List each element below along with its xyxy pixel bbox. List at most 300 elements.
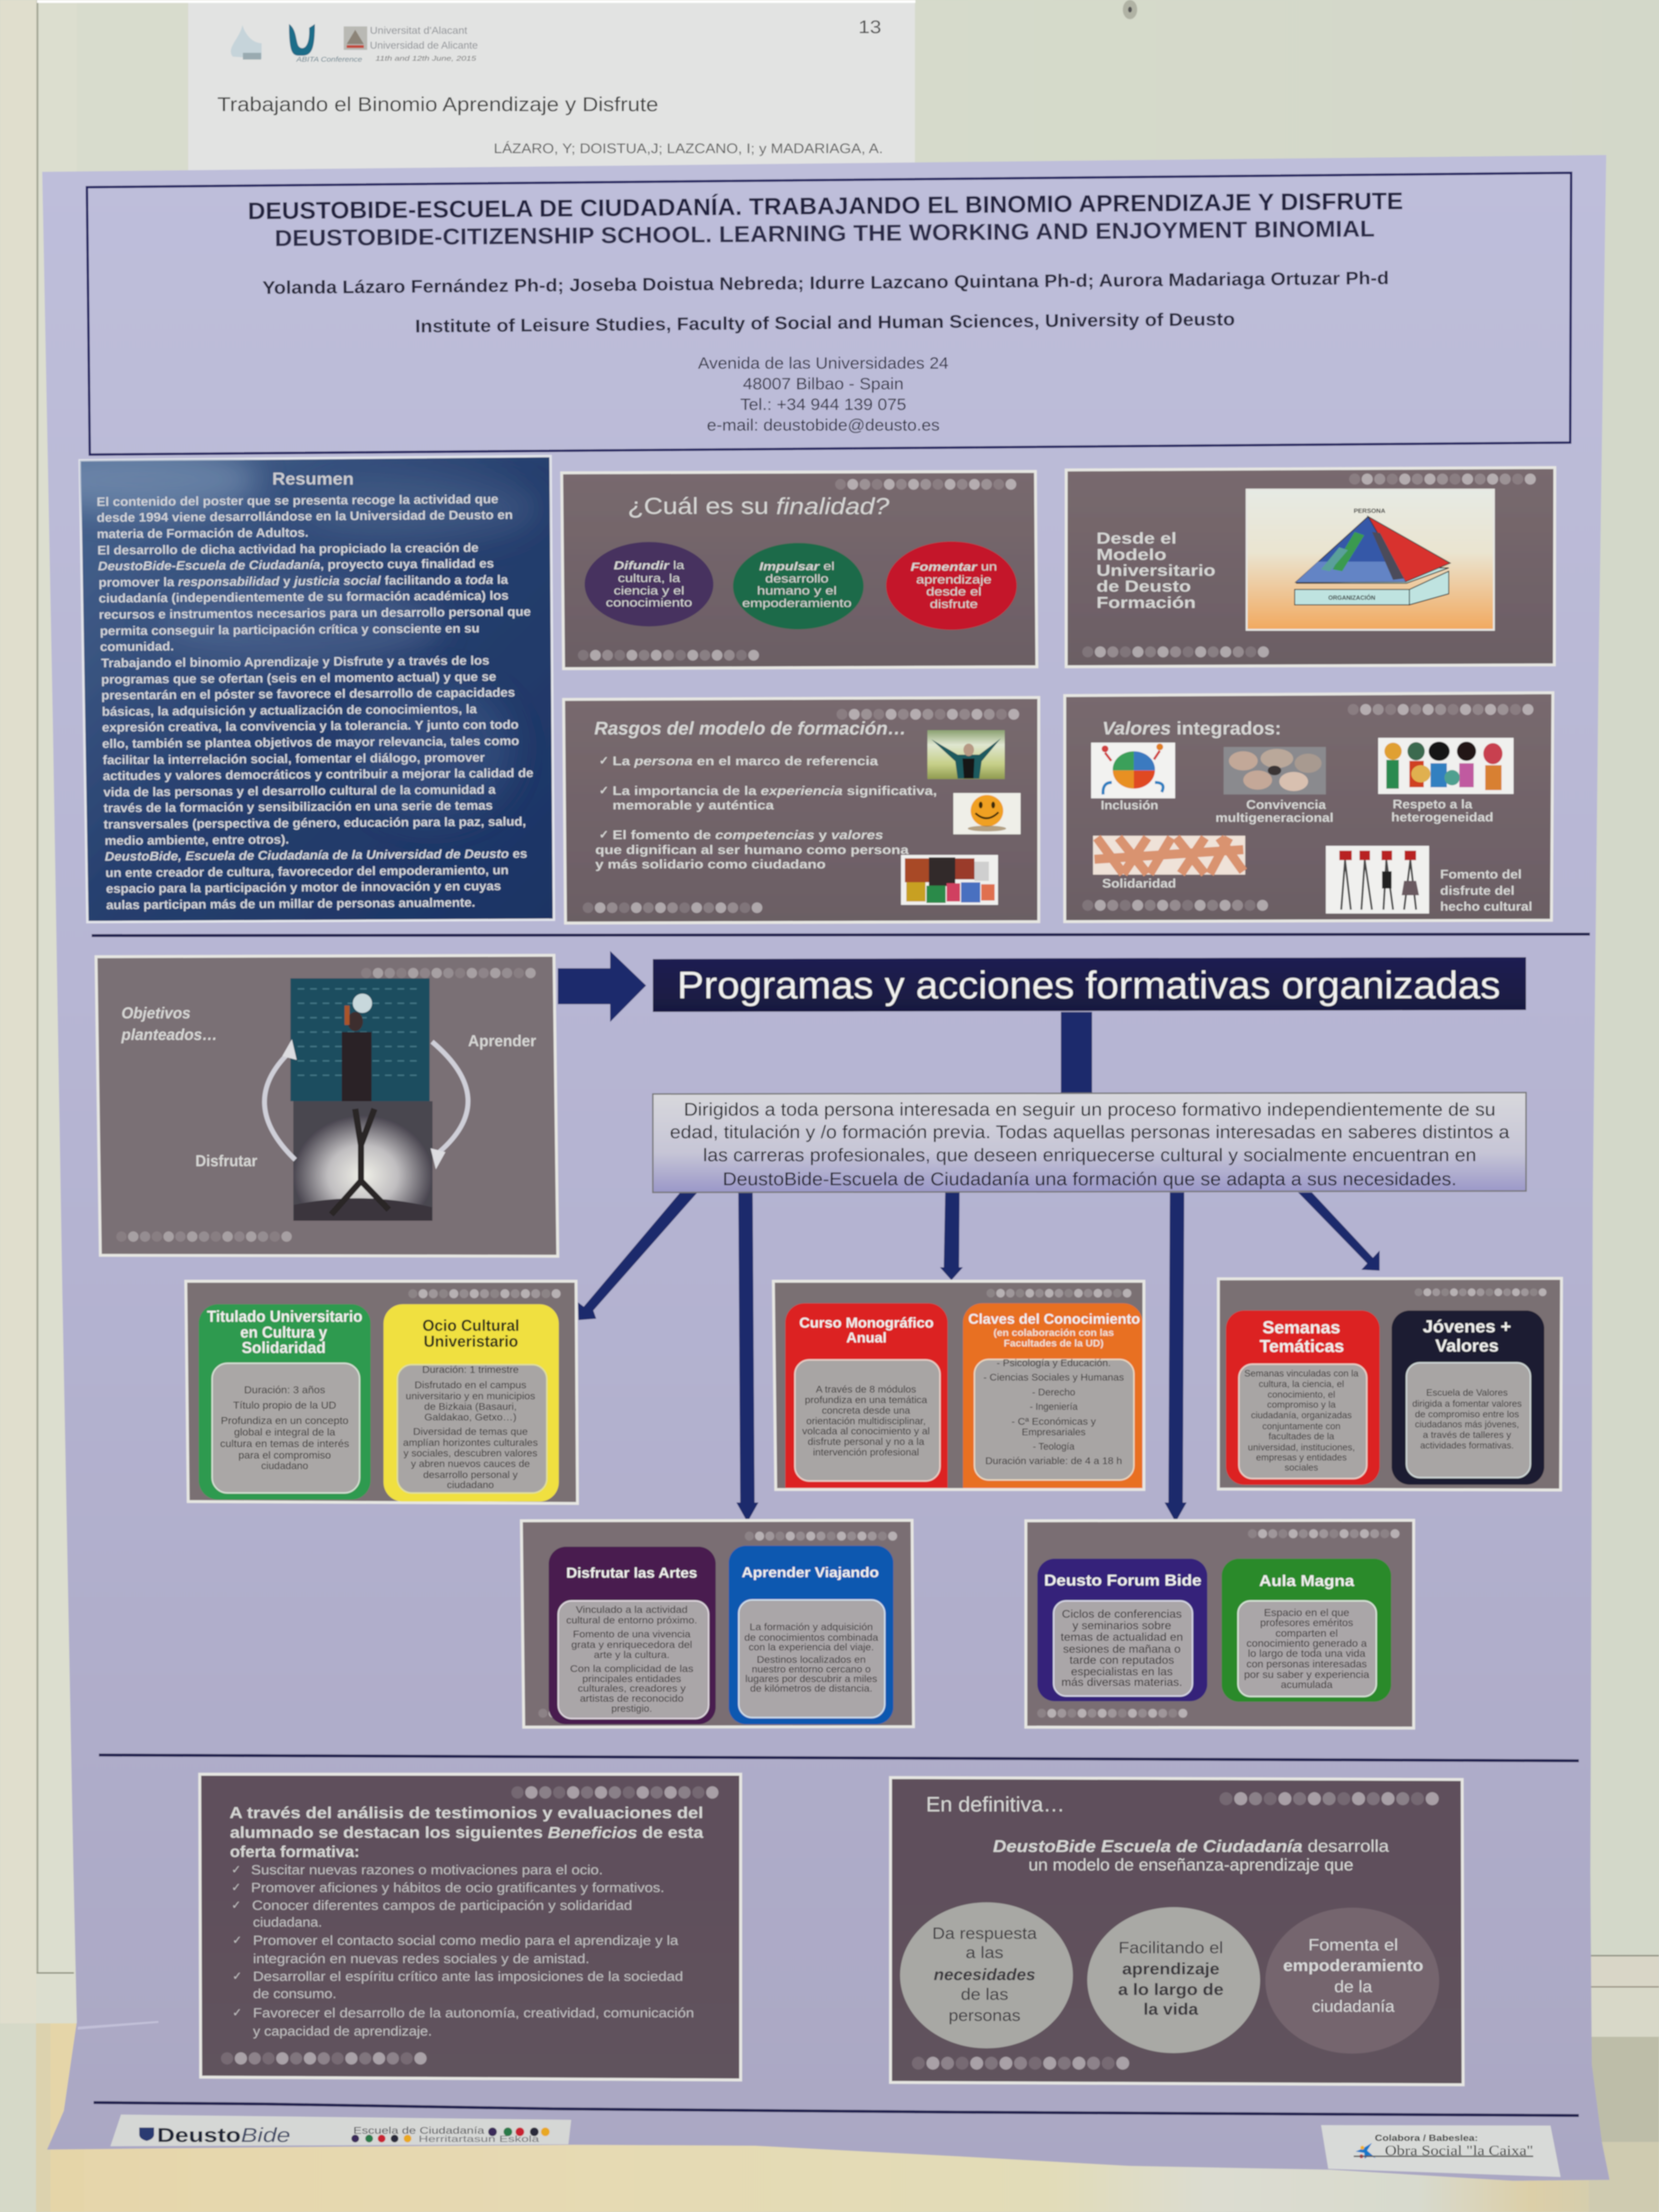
card: curso monográfico: volcada al conocimiento y al — [802, 1426, 930, 1437]
abstract text: través de la formación y sensibilización en una serie de temas — [104, 798, 493, 815]
card: curso monográfico: disfrute personal y no a la — [807, 1437, 925, 1447]
institution: Institute of Leisure Studies, Faculty of Social and Human Sciences, University of Deusto — [415, 310, 1235, 337]
circle: difundir: conocimiento — [606, 596, 692, 610]
intro text — [993, 1837, 1389, 1874]
circle: difundir: cultura, la — [618, 572, 681, 585]
circle: aprendizaje: aprendizaje — [1122, 1960, 1219, 1978]
logo box: obra social la caixa: Colabora / Babeslea: — [1375, 2133, 1478, 2143]
caption: fomento — [1440, 867, 1532, 914]
card: ocio cultural: de Bizkaia (Basauri, — [424, 1402, 517, 1412]
card: claves del conocimiento: Claves del Conocimiento — [968, 1311, 1140, 1327]
card: disfrutar las artes — [549, 1547, 716, 1724]
card: curso monográfico: Anual — [846, 1330, 887, 1346]
text: objetivos: planteados… — [121, 1025, 217, 1044]
card: deusto forum bide — [1037, 1559, 1207, 1701]
card: semanas temáticas: Semanas vinculadas con la — [1244, 1369, 1358, 1379]
text: desde el modelo: Formación — [1096, 593, 1196, 612]
card: disfrutar las artes: Fomento de una vivencia — [573, 1629, 691, 1640]
icon: conference logos: 11th and 12th June, 2015 — [375, 55, 477, 62]
card: aprender viajando: Destinos localizados en — [757, 1655, 866, 1665]
caption: convivencia: multigeneracional — [1215, 810, 1334, 825]
card: titulado universitario: cultura en temas de interés — [220, 1438, 349, 1450]
list of traits: ✓ — [599, 755, 609, 767]
circle: fomentar: disfrute — [930, 598, 978, 611]
caption: respeto: heterogeneidad — [1391, 810, 1493, 824]
circle: aprendizaje: la vida — [1143, 2000, 1199, 2019]
benefits list — [231, 1863, 694, 2038]
card: aprender viajando: Aprender Viajando — [742, 1565, 879, 1580]
benefits list: Conocer diferentes campos de participación y solidaridad — [252, 1898, 632, 1912]
photo: smiley — [953, 793, 1021, 834]
card: disfrutar las artes: prestigio. — [612, 1704, 652, 1714]
abstract text: Trabajando el binomio Aprendizaje y Disfrute y a través de los — [101, 653, 490, 670]
caption: convivencia: Convivencia — [1246, 797, 1326, 812]
card: aula magna: con personas interesadas — [1246, 1659, 1367, 1670]
icon: conference logos — [231, 24, 478, 63]
benefits list: ✓ — [232, 2007, 242, 2019]
card: ocio cultural: Ocio Cultural — [422, 1316, 519, 1334]
panel: forum y aula magna — [1026, 1520, 1414, 1728]
abstract text: un ente creador de cultura, favorecedor del empoderamiento, un — [105, 863, 509, 880]
card: jóvenes + valores — [1392, 1310, 1544, 1485]
benefits list: Favorecer el desarrollo de la autonomía, creatividad, comunicación — [253, 2006, 694, 2020]
text: desde el modelo: Desde el — [1096, 529, 1177, 547]
card: ocio cultural: universitario y en municipios — [406, 1391, 535, 1402]
abstract text — [96, 492, 534, 912]
arrow: to semanas panel — [1298, 1192, 1380, 1271]
circle: empoderamiento: ciudadanía — [1312, 1997, 1395, 2016]
circle: fomentar: desde el — [926, 586, 981, 598]
list of traits: memorable y auténtica — [613, 798, 774, 812]
text: desde el modelo — [1096, 529, 1215, 612]
logo box: obra social la caixa — [1321, 2125, 1561, 2177]
heading: Rasgos del modelo de formación… — [594, 719, 906, 739]
description box: edad, titulación y /o formación previa. Todas aquellas personas interesadas en saberes distintos a — [670, 1122, 1510, 1142]
circle: necesidades: a las — [966, 1944, 1003, 1962]
arrow: to forum panel — [1165, 1192, 1187, 1522]
card: titulado universitario: ciudadano — [261, 1460, 308, 1472]
labels: aprender and disfrutar — [195, 1032, 536, 1169]
icon: deusto shield — [139, 2128, 154, 2141]
card: disfrutar las artes: principales entidades — [582, 1674, 681, 1684]
description box: DeustoBide-Escuela de Ciudadanía una formación que se adapta a sus necesidades. — [723, 1169, 1456, 1190]
photo: person jumping — [293, 1101, 433, 1221]
abstract text: espacio para la participación y motor de innovación y en cuyas — [106, 878, 501, 896]
heading text: oferta formativa: — [230, 1842, 360, 1861]
card: disfrutar las artes: culturales, creadores y — [578, 1683, 685, 1694]
heading: ¿Cuál es su finalidad? — [628, 493, 890, 519]
card: aula magna: Espacio en el que — [1264, 1607, 1349, 1619]
logo box: obra social la caixa: Obra Social "la Caixa" — [1385, 2143, 1533, 2158]
list of traits: La persona en el marco de referencia — [613, 754, 878, 768]
benefits list: ✓ — [231, 1899, 241, 1911]
photo: collage — [901, 855, 998, 905]
brand name: Deusto Bide — [157, 2124, 290, 2146]
circle: empoderamiento: de la — [1334, 1978, 1372, 1996]
card: jóvenes + valores: de compromiso entre los — [1415, 1409, 1519, 1420]
card: claves del conocimiento: - Teología — [1033, 1442, 1075, 1452]
card: jóvenes + valores: ciudadanos más jóvenes, — [1415, 1420, 1519, 1430]
conference sheet — [188, 3, 915, 171]
panel: rasgos del modelo — [564, 697, 1039, 923]
abstract text: promover la responsabilidad y justicia social facilitando a toda la — [98, 572, 508, 589]
card: deusto forum bide: especialistas en las — [1071, 1665, 1173, 1678]
card: deusto forum bide: más diversas materias. — [1061, 1676, 1182, 1688]
icon: conference logos: Universidad de Alicante — [370, 40, 478, 51]
sheet title: Trabajando el Binomio Aprendizaje y Disfrute — [217, 93, 659, 115]
image: fashion sketch figures — [1326, 846, 1429, 914]
heading: En definitiva… — [926, 1792, 1065, 1816]
panel: en definitiva — [890, 1778, 1463, 2085]
card: disfrutar las artes: Vinculado a la actividad — [576, 1605, 687, 1615]
escuela de ciudadanía wordmark — [351, 2126, 550, 2144]
card: deusto forum bide: Deusto Forum Bide — [1044, 1572, 1202, 1589]
abstract text: expresión creativa, la convivencia y la tolerancia. Y junto con todo — [102, 717, 519, 734]
photo: woman with raised arms — [927, 730, 1005, 779]
benefits list: ciudadana. — [253, 1914, 322, 1930]
card: jóvenes + valores: actividades formativas. — [1420, 1441, 1514, 1451]
card: semanas temáticas: universidad, instituciones, — [1248, 1443, 1355, 1453]
card: ocio cultural: y sociales, descubren valores — [403, 1448, 538, 1459]
abstract text: vida de las personas y el desarrollo cultural de la comunidad a — [103, 782, 496, 799]
card: titulado universitario: Titulado Universitario — [207, 1308, 362, 1325]
title: DEUSTOBIDE-ESCUELA DE CIUDADANÍA. TRABAJANDO EL BINOMIO APRENDIZAJE Y DISFRUTE — [248, 188, 1403, 225]
circle: impulsar: empoderamiento — [742, 597, 852, 610]
card: titulado universitario: Profundiza en un concepto — [221, 1415, 349, 1427]
abstract text: actitudes y valores democráticos y contribuir a mejorar la calidad de — [103, 766, 533, 783]
heading: Valores integrados: — [1102, 719, 1281, 739]
panel: resumen — [78, 454, 556, 924]
chart: pyramid diagram — [1247, 490, 1494, 630]
card: curso monográfico: A través de 8 módulos — [816, 1384, 916, 1395]
abstract text: DeustoBide, Escuela de Ciudadanía de la Universidad de Deusto es — [105, 846, 527, 864]
benefits list: Suscitar nuevas razones o motivaciones para el ocio. — [251, 1863, 603, 1877]
list of traits — [595, 754, 937, 871]
panel: finalidad — [562, 471, 1037, 669]
card: claves del conocimiento: - Cª Económicas y — [1011, 1417, 1096, 1427]
abstract text: transversales (perspectiva de género, educación para la paz, salud, — [104, 814, 526, 831]
heading text: alumnado se destacan los siguientes Beneficios de esta — [230, 1823, 704, 1841]
card: disfrutar las artes: Con la complicidad de las — [570, 1664, 693, 1674]
circle: difundir: Difundir la — [613, 559, 685, 572]
arrow: to programmes title — [558, 951, 646, 1022]
heading text: A través del análisis de testimonios y evaluaciones del — [229, 1804, 703, 1821]
card: claves del conocimiento — [963, 1303, 1142, 1488]
escuela de ciudadanía wordmark: Escuela de Ciudadanía — [353, 2126, 485, 2136]
card: aula magna: profesores eméritos — [1260, 1618, 1353, 1628]
benefits list: Promover aficiones y hábitos de ocio gratificantes y formativos. — [251, 1880, 664, 1895]
card: jóvenes + valores: Jóvenes + — [1423, 1316, 1511, 1336]
panel: valores integrados — [1065, 693, 1553, 922]
benefits list: Promover el contacto social como medio para el aprendizaje y la — [253, 1933, 678, 1948]
card: curso monográfico — [785, 1303, 948, 1488]
card: titulado universitario: Duración: 3 años — [244, 1384, 325, 1396]
card: aula magna: Aula Magna — [1259, 1572, 1354, 1589]
abstract text: recursos e instrumentos necesarios para un desarrollo personal que — [99, 604, 531, 622]
card: ocio cultural: y abren nuevos cauces de — [411, 1459, 530, 1469]
card: aprender viajando: La formación y adquisición — [750, 1622, 873, 1633]
card: ocio cultural: Duración: 1 trimestre — [422, 1365, 518, 1375]
abstract text: materia de Formación de Adultos. — [97, 525, 309, 541]
circle: empoderamiento: Fomenta el — [1309, 1936, 1398, 1954]
card: deusto forum bide: Ciclos de conferencias — [1062, 1608, 1182, 1620]
abstract text: DeustoBide-Escuela de Ciudadanía , proyecto cuya finalidad es — [98, 556, 494, 573]
card: jóvenes + valores: dirigida a fomentar valores — [1412, 1399, 1522, 1409]
abstract text: El desarrollo de dicha actividad ha propiciado la creación de — [97, 541, 479, 557]
contact details: Tel.: +34 944 139 075 — [740, 396, 906, 414]
circle: fomentar: aprendizaje — [916, 573, 992, 587]
benefits list: ✓ — [231, 1881, 241, 1894]
card: semanas temáticas: compromiso y la — [1267, 1400, 1336, 1410]
benefits list: integración en nuevas redes sociales y de amistad. — [253, 1951, 589, 1966]
circle: impulsar: desarrollo — [765, 572, 829, 586]
circle: aprendizaje — [1087, 1907, 1260, 2053]
card: ocio cultural — [384, 1304, 559, 1502]
card: ocio cultural: ciudadano — [447, 1480, 494, 1491]
card: semanas temáticas: conjuntamente con — [1262, 1422, 1340, 1431]
circle: necesidades — [900, 1902, 1073, 2048]
text: objetivos: Objetivos — [121, 1004, 191, 1022]
intro text: DeustoBide Escuela de Ciudadanía desarrolla — [993, 1837, 1389, 1856]
card: claves del conocimiento: - Ciencias Sociales y Humanas — [983, 1372, 1124, 1383]
card: semanas temáticas: facultades de la — [1268, 1431, 1334, 1442]
card: semanas temáticas: sociales — [1285, 1463, 1318, 1473]
card: aprender viajando: de conocimientos combinada — [744, 1633, 878, 1643]
abstract text: básicas, la adquisición y actualización de conocimientos, la — [102, 702, 477, 719]
benefits list: de consumo. — [253, 1986, 337, 2001]
chart: pyramid diagram: PERSONA — [1354, 507, 1386, 515]
card: claves del conocimiento: Facultades de la UD) — [1004, 1338, 1104, 1349]
image: cartoon children — [1378, 738, 1514, 794]
image: solidaridad interlaced hands — [1093, 836, 1245, 875]
card: jóvenes + valores: Valores — [1435, 1335, 1499, 1356]
subtitle: DEUSTOBIDE-CITIZENSHIP SCHOOL. LEARNING THE WORKING AND ENJOYMENT BINOMIAL — [275, 216, 1375, 252]
panel: objetivos planteados — [96, 955, 558, 1256]
card: semanas temáticas: Temáticas — [1260, 1336, 1344, 1356]
card: titulado universitario: Solidaridad — [242, 1338, 325, 1357]
card: curso monográfico: Curso Monográfico — [799, 1315, 934, 1331]
card: ocio cultural: Disfrutado en el campus — [415, 1380, 526, 1391]
card: curso monográfico: concreta desde una — [822, 1406, 911, 1416]
card: jóvenes + valores: Escuela de Valores — [1426, 1388, 1508, 1398]
labels: aprender and disfrutar: Disfrutar — [195, 1152, 257, 1169]
circle: empoderamiento — [1265, 1908, 1439, 2054]
list of traits: La importancia de la experiencia significativa, — [613, 783, 937, 798]
card: aula magna — [1222, 1559, 1391, 1702]
benefits list: ✓ — [231, 1863, 241, 1876]
panel: modelo universitario — [1066, 468, 1555, 667]
wall screw — [1123, 0, 1137, 19]
page number: 13 — [858, 17, 881, 37]
card: disfrutar las artes: grata y enriquecedora del — [571, 1640, 692, 1650]
circle: aprendizaje: a lo largo de — [1118, 1981, 1224, 1999]
title bar: programas: Programas y acciones formativas organizadas — [677, 964, 1501, 1006]
card: deusto forum bide: tarde con reputados — [1070, 1654, 1174, 1666]
image: inclusión puzzle — [1091, 743, 1175, 798]
card: disfrutar las artes: artistas de reconocido — [580, 1694, 684, 1704]
panel: artes y viajes — [521, 1520, 914, 1727]
card: claves del conocimiento: (en colaboración con las — [994, 1328, 1114, 1338]
panel: curso y claves — [773, 1281, 1144, 1490]
card: disfrutar las artes: cultural de entorno próximo. — [566, 1615, 697, 1626]
sheet authors: LÁZARO, Y; DOISTUA,J; LAZCANO, I; y MADARIAGA, A. — [493, 141, 883, 156]
card: aula magna: acumulada — [1281, 1679, 1333, 1691]
benefits list: Desarrollar el espíritu crítico ante las imposiciones de la sociedad — [253, 1969, 683, 1984]
card: ocio cultural: desarrollo personal y — [423, 1470, 517, 1480]
authors: Yolanda Lázaro Fernández Ph-d; Joseba Doistua Nebreda; Idurre Lazcano Quintana Ph-d; Aurora Madariaga Ortuzar Ph-d — [262, 268, 1389, 298]
card: titulado universitario: global e integral de la — [234, 1427, 336, 1438]
card: semanas temáticas: cultura, la ciencia, el — [1259, 1380, 1344, 1389]
white paper strip at top — [37, 0, 915, 3]
circle: impulsar: humano y el — [757, 585, 837, 597]
abstract text: facilitar la interrelación social, fomentar el diálogo, promover — [103, 750, 485, 767]
escuela de ciudadanía wordmark: Herritartasun Eskola — [419, 2134, 540, 2144]
labels: aprender and disfrutar: Aprender — [468, 1032, 536, 1049]
list of traits: El fomento de competencias y valores — [613, 828, 883, 842]
card: claves del conocimiento: - Psicología y Educación. — [997, 1358, 1111, 1369]
card: jóvenes + valores: a través de talleres y — [1423, 1431, 1512, 1440]
caption: fomento: Fomento del — [1440, 867, 1522, 881]
description box: las carreras profesionales, que deseen enriquecerse cultural y socialmente encuentran en — [703, 1145, 1477, 1166]
image: group of faces — [1224, 747, 1326, 794]
text: desde el modelo: Modelo — [1096, 545, 1166, 564]
arrow: to titulado panel — [578, 1192, 697, 1320]
card: aprender viajando: lugares por descubrir a miles — [745, 1674, 878, 1684]
card: aula magna: lo largo de toda una vida — [1248, 1648, 1366, 1659]
benefits list: ✓ — [232, 1934, 242, 1947]
caption: convivencia — [1215, 797, 1334, 825]
circle: difundir: ciencia y el — [613, 585, 685, 597]
abstract text: presentarán en el póster se favorece el desarrollo de capacidades — [101, 685, 515, 702]
panel: semanas y jóvenes — [1218, 1278, 1562, 1490]
list of traits: que dignifican al ser humano como persona — [595, 842, 909, 857]
text: objetivos — [121, 1004, 217, 1044]
list of traits: ✓ — [599, 784, 609, 797]
header box — [87, 173, 1571, 455]
circle: difundir — [585, 542, 713, 626]
description box: Dirigidos a toda persona interesada en seguir un proceso formativo independientemente de su — [684, 1100, 1496, 1120]
icon: conference logos: ABITA Conference — [296, 56, 362, 63]
heading: Resumen — [272, 469, 354, 489]
card: deusto forum bide: sesiones de mañana o — [1063, 1643, 1181, 1655]
panel: titulado y ocio — [186, 1281, 577, 1503]
circle: aprendizaje: Facilitando el — [1118, 1939, 1223, 1957]
card: aula magna: por su saber y experiencia — [1244, 1670, 1370, 1680]
card: aprender viajando: nuestro entorno cercano o — [752, 1664, 871, 1675]
card: aprender viajando: de kilómetros de distancia. — [750, 1683, 873, 1694]
card: claves del conocimiento: Duración variable: de 4 a 18 h — [985, 1456, 1122, 1467]
caption: inclusión: Inclusión — [1101, 798, 1158, 812]
arrow: disfrutar to aprender — [264, 1039, 297, 1160]
card: titulado universitario: para el compromiso — [238, 1450, 331, 1461]
card: deusto forum bide: y seminarios sobre — [1072, 1619, 1171, 1632]
heading text — [229, 1804, 704, 1861]
abstract text: ciudadanía (independientemente de su formación académica) los — [98, 588, 509, 605]
contact details: e-mail: deustobide@deusto.es — [707, 416, 940, 434]
caption: respeto: Respeto a la — [1393, 797, 1473, 811]
caption: solidaridad: Solidaridad — [1102, 876, 1176, 890]
circle: necesidades: de las — [961, 1985, 1008, 2004]
card: ocio cultural: Univeristario — [423, 1333, 518, 1350]
card: semanas temáticas — [1226, 1310, 1380, 1485]
circle: necesidades: Da respuesta — [932, 1924, 1037, 1943]
card: aula magna: conocimiento generado a — [1246, 1638, 1367, 1649]
card: titulado universitario: en Cultura y — [240, 1323, 327, 1341]
card: semanas temáticas: conocimiento, el — [1267, 1390, 1335, 1400]
card: disfrutar las artes: Disfrutar las Artes — [566, 1565, 697, 1581]
card: curso monográfico: profundiza en una temática — [805, 1395, 927, 1406]
card: aula magna: comparten el — [1275, 1628, 1338, 1639]
caption: respeto — [1391, 797, 1493, 824]
arrow: to curso panel — [940, 1192, 963, 1280]
abstract text: ello, también se plantea objetivos de mayor relevancia, tales como — [102, 733, 519, 751]
right wall skirting — [1589, 1956, 1659, 2212]
card: titulado universitario: Título propio de la UD — [233, 1400, 336, 1411]
contact details — [698, 354, 949, 434]
arrow: to artes panel — [736, 1192, 758, 1522]
abstract text: desde 1994 viene desarrollándose en la Universidad de Deusto en — [96, 507, 513, 525]
caption: fomento: hecho cultural — [1440, 899, 1532, 914]
text: desde el modelo: Universitario — [1096, 562, 1215, 579]
card: semanas temáticas: ciudadanía, organizadas — [1251, 1410, 1352, 1421]
description box — [653, 1093, 1526, 1192]
caption: fomento: disfrute del — [1440, 883, 1515, 898]
photo: man at blackboard — [290, 978, 430, 1101]
card: claves del conocimiento: - Ingeniería — [1030, 1402, 1078, 1412]
card: deusto forum bide: temas de actualidad en — [1061, 1631, 1183, 1643]
chart: pyramid diagram: ORGANIZACIÓN — [1328, 594, 1375, 601]
abstract text: El contenido del poster que se presenta recoge la actividad que — [96, 492, 498, 509]
benefits list: y capacidad de aprendizaje. — [253, 2024, 432, 2038]
benefits list: ✓ — [232, 1970, 242, 1983]
card: titulado universitario — [199, 1304, 371, 1500]
intro text: un modelo de enseñanza-aprendizaje que — [1028, 1856, 1354, 1874]
card: curso monográfico: orientación multidisciplinar, — [806, 1416, 926, 1427]
floor — [48, 2142, 1659, 2212]
panel: beneficios — [200, 1774, 741, 2080]
card: curso monográfico: intervención profesional — [813, 1447, 919, 1458]
card: claves del conocimiento: Empresariales — [1022, 1427, 1086, 1438]
logo strip: deustobide — [110, 2115, 571, 2146]
card: claves del conocimiento: - Derecho — [1032, 1387, 1075, 1398]
circle: impulsar: Impulsar el — [759, 560, 834, 573]
text: desde el modelo: de Deusto — [1096, 577, 1191, 595]
contact details: 48007 Bilbao - Spain — [743, 375, 903, 393]
circle: necesidades: necesidades — [934, 1966, 1035, 1984]
circle: empoderamiento: empoderamiento — [1283, 1957, 1423, 1975]
connector: title to description — [1061, 1012, 1092, 1094]
circle: impulsar — [733, 543, 864, 629]
abstract text: programas que se ofertan (seis en el momento actual) y que se — [101, 669, 496, 686]
contact details: Avenida de las Universidades 24 — [698, 354, 949, 373]
abstract text: permita conseguir la participación crítica y consciente en su — [100, 621, 480, 638]
abstract text: comunidad. — [100, 639, 174, 654]
abstract text: medio ambiente, entre otros). — [105, 832, 289, 848]
card: ocio cultural: amplían horizontes culturales — [403, 1438, 538, 1448]
card: disfrutar las artes: arte y la cultura. — [594, 1650, 670, 1660]
card: aprender viajando: con la experiencia del viaje. — [749, 1642, 874, 1653]
circle: necesidades: personas — [949, 2007, 1021, 2025]
circle: fomentar: Fomentar un — [911, 561, 997, 573]
card: semanas temáticas: empresas y entidades — [1256, 1453, 1347, 1463]
abstract text: aulas participan más de un millar de personas anualmente. — [106, 895, 475, 912]
list of traits: y más solidario como ciudadano — [595, 857, 826, 871]
icon: caixa star — [1356, 2143, 1376, 2159]
icon: conference logos: Universitat d'Alacant — [370, 25, 468, 36]
circle: fomentar — [886, 541, 1017, 630]
card: ocio cultural: Galdakao, Getxo…) — [424, 1412, 517, 1423]
left door frame — [0, 0, 77, 2023]
